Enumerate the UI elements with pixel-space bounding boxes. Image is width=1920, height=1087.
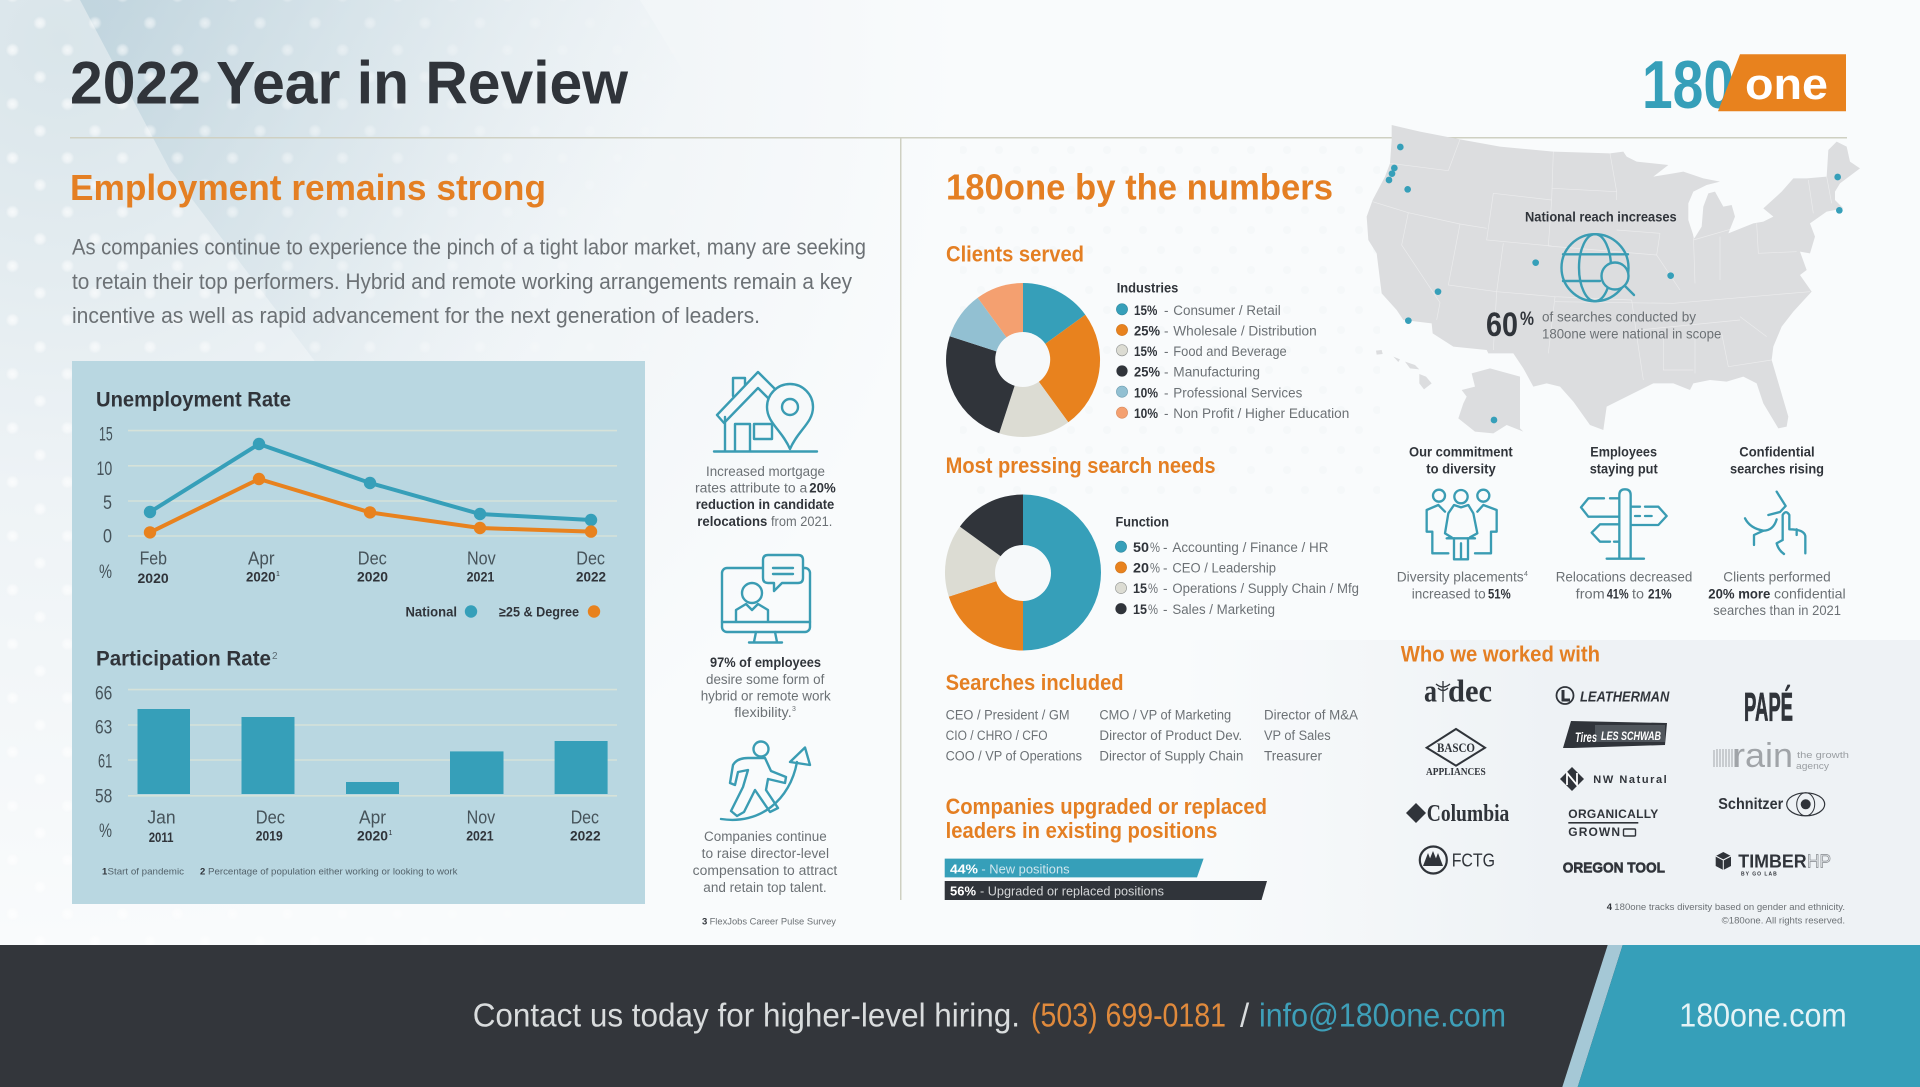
list: searches included: COO / VP of Operations [946,748,1082,764]
stat: 60 percent national: of searches conducted by [1542,309,1696,325]
bar chart: participation rate: 58 [95,786,112,808]
bar chart: participation rate: 63 [95,718,112,739]
logo: NW Natural [1560,767,1667,791]
heading: clients served: Clients served [946,242,1084,267]
chart footnotes: Start of pandemic [108,867,184,878]
logo: NW Natural: NW Natural [1593,774,1667,786]
column divider [900,138,902,900]
intro paragraph [72,234,866,328]
legend: industries: 25% [1134,365,1160,380]
panel: labor charts [72,361,645,904]
list: searches included: CEO / President / GM [946,708,1070,722]
logo: Organically Grown: ORGANICALLY [1568,807,1658,821]
legend: function: Function [1116,514,1169,530]
chart footnotes: Percentage of population either working or looking to work [208,867,458,878]
legend: national and degree: ≥25 & Degree [499,604,579,619]
intro paragraph: As companies continue to experience the pinch of a tight labor market, many are seeking [72,234,866,260]
logo: 180one: one [1745,60,1828,109]
list: searches included: Director of M&A [1264,708,1358,722]
donut chart: function [945,494,1101,650]
callout: commitment to diversity: Diversity placements [1397,569,1524,585]
line chart: unemployment rate: % [99,562,112,583]
legend: industries: - [1164,344,1168,359]
legend: industries: 10% [1134,385,1158,400]
line chart: unemployment rate: Apr [248,549,275,569]
callout: commitment to diversity: Our commitment [1409,444,1513,460]
footnote 4 and copyright [1607,902,1845,926]
line chart: unemployment rate: 5 [103,493,112,514]
logo: Organically Grown: GROWN [1568,825,1620,839]
callout: commitment to diversity: 51% [1488,585,1511,601]
bar: new positions 44 percent: 44% [950,862,978,876]
bar: new positions 44 percent [945,859,1204,877]
legend: industries: Wholesale / Distribution [1173,324,1317,339]
text: mortgage rates: reduction in candidate [696,497,835,512]
logo: Basco Appliances: APPLIANCES [1426,767,1486,778]
stat: 60 percent national: % [1520,309,1534,330]
intro paragraph: incentive as well as rapid advancement for the next generation of leaders. [72,303,760,328]
bar chart: participation rate: Jan [147,808,176,828]
stat: 60 percent national [1486,306,1721,344]
legend: function: Sales / Marketing [1172,602,1275,617]
legend: industries: - [1164,303,1168,318]
legend: industries: 10% [1134,406,1158,421]
footnote 4 and copyright: 180one tracks diversity based on gender and ethnicity. [1614,902,1845,913]
bar chart: participation rate: 61 [98,752,112,773]
callout: commitment to diversity: 4 [1524,571,1528,578]
line chart: unemployment rate: Dec [576,549,605,569]
chart footnotes: 1 [102,867,108,878]
bar chart: participation rate: Nov [467,808,495,828]
icon: remote worker on monitor [722,555,810,642]
text: hybrid work: hybrid or remote work [701,688,831,704]
line chart: unemployment rate [96,425,617,586]
line chart: unemployment rate: 1 [276,571,280,578]
logo: Basco Appliances: BASCO [1437,740,1475,755]
logo: TimberHP: HP [1807,851,1831,871]
legend: function: 50 [1133,540,1149,555]
callout: confidential searches rising: searches than in 2021 [1713,602,1841,618]
text: director compensation: Companies continue [704,829,827,844]
bar chart: participation rate: 1 [388,830,392,837]
legend: function: - [1163,540,1168,555]
legend: industries: Industries [1117,280,1178,295]
bar: upgraded positions 56 percent: 56% [950,884,976,898]
call to action text [473,996,1506,1034]
chart title: participation rate: Participation Rate [96,648,271,671]
line chart: unemployment rate: 2022 [576,570,606,585]
heading: companies upgraded or replaced: leaders in existing positions [946,818,1217,843]
bar: upgraded positions 56 percent [945,881,1267,900]
callout: confidential searches rising: Confidential [1739,444,1815,460]
logo: Les Schwab Tires: LES SCHWAB [1601,731,1661,743]
heading: 180one by the numbers: 180one by the numbers [946,166,1333,208]
callout: employees staying put: to [1632,585,1644,601]
logo: A-dec: dec [1448,673,1492,709]
list: searches included: CIO / CHRO / CFO [946,728,1048,743]
legend: function: - [1163,581,1168,596]
logo: Columbia: Columbia [1427,801,1509,827]
callout: commitment to diversity: increased to [1412,585,1486,601]
legend: function: % [1150,560,1160,576]
icon: globe with magnifier [1562,234,1634,301]
callout: employees staying put: Employees [1590,444,1657,460]
line chart: unemployment rate: 2020 [138,571,169,586]
text: hybrid work: desire some form of [706,672,825,687]
callout: confidential searches rising: 20% more [1708,585,1770,601]
logo: A-dec: a [1424,673,1437,709]
line chart: unemployment rate: 10 [96,459,112,480]
line chart: unemployment rate: 0 [103,527,112,548]
legend: industries: - [1164,385,1168,400]
heading: companies upgraded or replaced: Companies upgraded or replaced [946,794,1267,819]
bar chart: participation rate: 2021 [466,829,494,844]
legend: function: 15 [1133,581,1147,596]
text: hybrid work: 97% of employees [710,655,821,670]
logo: FCTG [1420,846,1495,874]
chart title: unemployment rate: Unemployment Rate [96,389,291,412]
call to action text: (503) 699-0181 [1031,996,1226,1034]
logo: A-dec [1424,673,1492,709]
line chart: unemployment rate: 2021 [467,570,495,585]
list: searches included [946,708,1358,764]
legend: national and degree: National [406,604,457,619]
heading: who we worked with: Who we worked with [1401,642,1600,667]
callout: employees staying put: 41% [1607,585,1629,601]
text: hybrid work [701,655,831,720]
chart footnotes [102,867,458,878]
logo: Les Schwab Tires: Tires [1575,729,1597,745]
bar: new positions 44 percent: - New positions [981,862,1070,876]
bar chart: participation rate: 2011 [149,830,174,845]
callout: confidential searches rising: searches rising [1730,461,1824,477]
callout: confidential searches rising: confidential [1774,585,1846,601]
header rule [70,137,1847,138]
legend: function: CEO / Leadership [1172,560,1276,576]
legend: industries [1116,280,1349,421]
callout: employees staying put: from [1576,585,1605,601]
logo: Leatherman [1556,687,1670,706]
callout: employees staying put: Relocations decreased [1556,569,1692,585]
donut chart: industries [946,283,1100,437]
footnote 3: FlexJobs Career Pulse Survey [710,916,836,928]
icon: signpost [1581,489,1667,559]
text: mortgage rates: relocations [697,514,767,529]
bar chart: participation rate: 2019 [256,829,283,844]
bar chart: participation rate [95,684,617,845]
bar chart: participation rate: % [99,821,112,842]
heading: companies upgraded or replaced [946,794,1267,843]
callout: confidential searches rising: Clients performed [1723,569,1831,585]
logo: Schnitzer: Schnitzer [1718,796,1783,813]
map: United States [1367,125,1860,433]
title: 2022 Year in Review [70,50,628,116]
bar: upgraded positions 56 percent: - Upgraded or replaced positions [980,884,1164,898]
bar chart: participation rate: 2022 [570,829,601,844]
client logos [1406,673,1849,878]
line chart: unemployment rate: 15 [99,425,113,446]
text: hybrid work: 3 [792,706,796,713]
website: 180one.com [1679,997,1847,1034]
text: mortgage rates: rates attribute to a [695,480,808,496]
logo: 180one [1642,47,1846,123]
bar chart: participation rate: 2020 [357,829,388,844]
legend: industries: - [1164,406,1168,421]
text: national reach heading: National reach increases [1525,209,1677,225]
legend: industries: Food and Beverage [1173,344,1287,359]
legend: function [1115,514,1359,617]
call to action text: Contact us today for higher-level hiring. [473,996,1020,1034]
icon: person climbing arrow [721,742,810,820]
legend: function: Operations / Supply Chain / Mfg [1172,581,1359,596]
logo: rain the growth agency [1714,737,1849,775]
callout: commitment to diversity [1397,444,1528,601]
stat: 60 percent national: 180one were national in scope [1542,325,1721,341]
callout: employees staying put [1556,444,1692,601]
legend: industries: Consumer / Retail [1173,303,1281,318]
logo: rain the growth agency: rain [1733,737,1793,775]
logo: Les Schwab Tires [1563,721,1667,748]
chart title: participation rate: 2 [272,651,278,662]
legend: function: % [1148,602,1158,617]
heading: searches included: Searches included [946,670,1124,695]
list: searches included: CMO / VP of Marketing [1099,708,1231,722]
client logos: PAPÉ [1744,685,1793,730]
footer band [0,945,1920,1087]
list: searches included: Director of Supply Chain [1099,748,1243,764]
stat: 60 percent national: 60 [1486,306,1518,344]
text: director compensation: compensation to attract [693,863,838,878]
icon: house and map pin [714,372,817,452]
call to action text: / [1240,996,1250,1034]
legend: industries: Manufacturing [1173,365,1260,380]
legend: function: % [1148,581,1158,596]
call to action text: info@180one.com [1259,996,1506,1034]
logo: Schnitzer [1718,793,1825,816]
bar chart: participation rate: Dec [256,808,285,828]
logo: TimberHP [1716,851,1831,878]
logo: TimberHP: BY GO LAB [1741,872,1777,878]
legend: industries: - [1164,365,1168,380]
legend: function: 20 [1133,560,1149,576]
legend: industries: 15% [1134,303,1157,318]
heading: employment remains strong: Employment remains strong [70,167,546,208]
bar chart: participation rate: Apr [359,808,386,828]
text: mortgage rates: from 2021. [771,514,832,529]
legend: national and degree [406,604,600,619]
text: director compensation: to raise director-level [702,846,829,861]
chart footnotes: 2 [200,867,205,878]
legend: industries: Professional Services [1173,385,1303,400]
text: director compensation [693,829,838,895]
logo: Basco Appliances [1426,729,1486,778]
logo: Columbia [1406,801,1509,827]
callout: employees staying put: staying put [1590,461,1658,477]
text: mortgage rates: 20% [809,480,836,496]
logo: rain the growth agency: the growth [1797,750,1849,761]
logo: rain the growth agency: agency [1796,761,1829,772]
line chart: unemployment rate: 2020 [357,570,388,585]
callout: commitment to diversity: to diversity [1426,461,1496,477]
legend: function: Accounting / Finance / HR [1172,540,1329,555]
legend: function: 15 [1133,602,1147,617]
logo: FCTG: FCTG [1452,851,1495,871]
icon: three people [1427,490,1497,559]
list: searches included: Director of Product Dev. [1099,728,1242,743]
icon: finger to lips [1745,492,1805,554]
legend: industries: - [1164,324,1168,339]
callout: employees staying put: 21% [1648,585,1672,601]
intro paragraph: to retain their top performers. Hybrid and remote working arrangements remain a key [72,269,852,294]
logo: Leatherman: LEATHERMAN [1580,689,1670,706]
text: mortgage rates: Increased mortgage [706,464,825,479]
line chart: unemployment rate: Dec [358,549,387,569]
legend: industries: 25% [1134,324,1160,339]
line chart: unemployment rate: Nov [467,549,496,569]
list: searches included: VP of Sales [1264,728,1331,743]
line chart: unemployment rate: Feb [140,549,167,569]
legend: function: - [1163,602,1168,617]
logo: TimberHP: TIMBER [1738,851,1807,871]
text: director compensation: and retain top talent. [703,880,827,895]
legend: industries: Non Profit / Higher Education [1173,406,1349,421]
text: mortgage rates [695,464,836,529]
bar chart: participation rate: 66 [95,684,112,705]
legend: industries: 15% [1134,344,1157,359]
heading: most pressing search needs: Most pressing search needs [946,453,1216,478]
list: searches included: Treasurer [1264,748,1323,764]
callout: confidential searches rising [1708,444,1846,618]
logo: Oregon Tool: OREGON TOOL [1563,860,1665,877]
bar chart: participation rate: Dec [571,808,599,828]
footnote 4 and copyright: ©180one. All rights reserved. [1722,916,1845,926]
footnote 3: 3 [702,916,707,928]
footnote 4 and copyright: 4 [1607,902,1613,913]
legend: function: - [1163,560,1168,576]
text: hybrid work: flexibility. [734,705,792,720]
line chart: unemployment rate: 2020 [246,570,276,585]
logo: 180one: 180 [1642,47,1734,123]
logo: Organically Grown [1568,807,1658,839]
legend: function: % [1150,540,1160,555]
